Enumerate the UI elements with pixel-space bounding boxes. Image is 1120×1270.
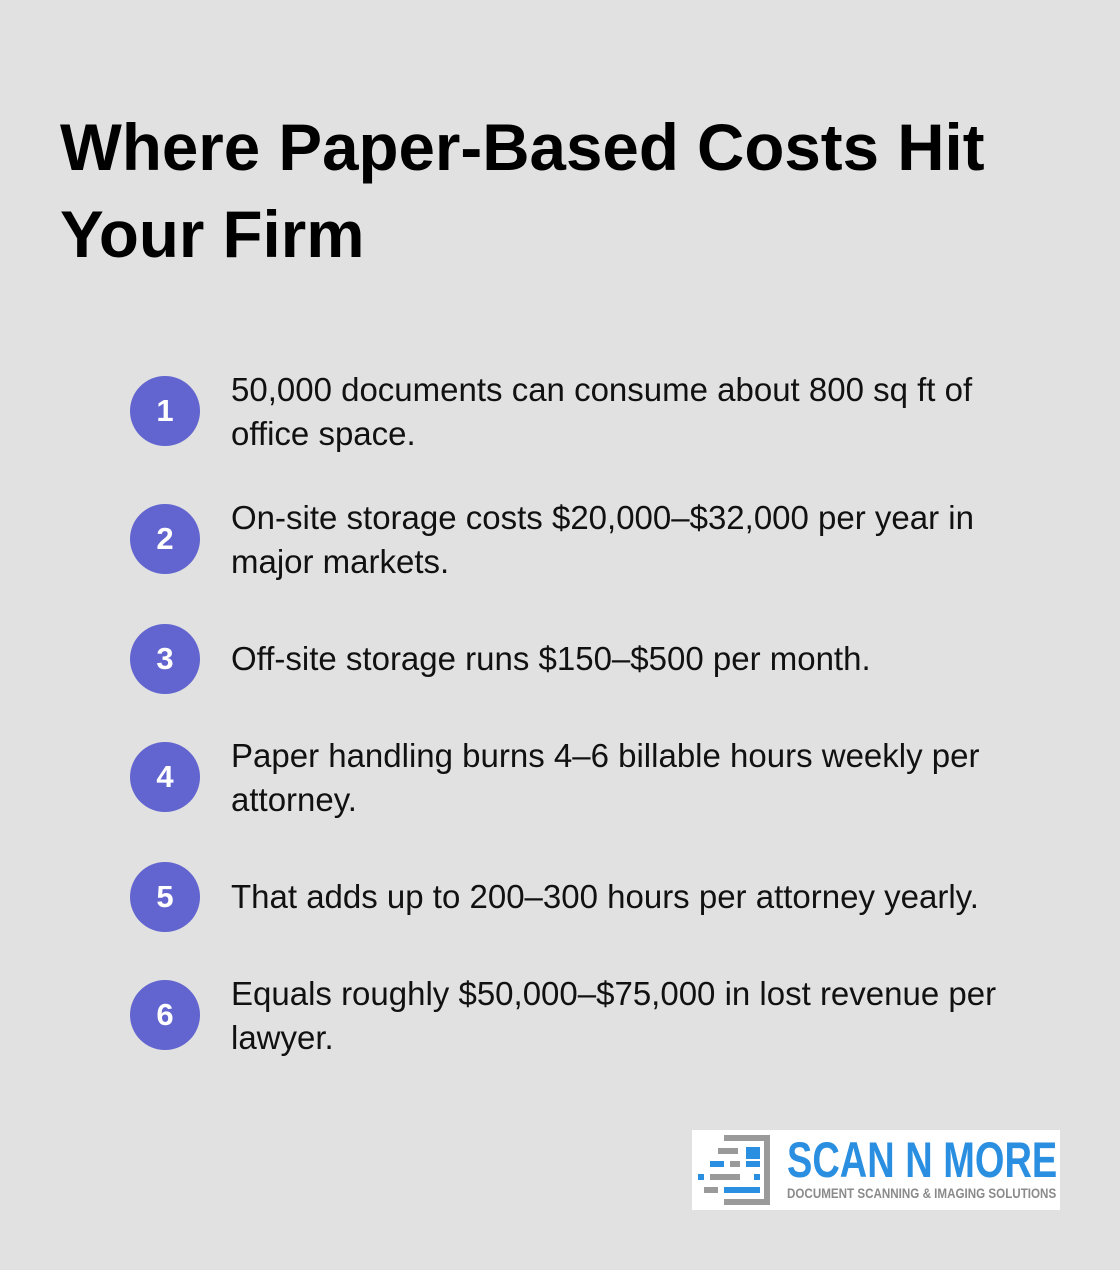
item 6: Equals roughly $50,000–$75,000 in lost revenue per lawyer. [231, 975, 996, 1056]
item 5 [130, 862, 979, 932]
item 1: 50,000 documents can consume about 800 sq ft of office space. [231, 371, 972, 452]
item 1: 1 [156, 393, 174, 428]
item 4: Paper handling burns 4–6 billable hours weekly per attorney. [231, 737, 979, 818]
item 3: 3 [156, 641, 174, 676]
item 2: On-site storage costs $20,000–$32,000 per year in major markets. [231, 499, 974, 580]
item 4: 4 [156, 759, 174, 794]
item 3 [130, 624, 871, 694]
logo [692, 1130, 1060, 1210]
logo: DOCUMENT SCANNING & IMAGING SOLUTIONS [787, 1185, 1056, 1201]
item 2: 2 [156, 521, 174, 556]
title [60, 111, 985, 271]
item 5: 5 [156, 879, 174, 914]
title: Where Paper-Based Costs Hit [60, 111, 985, 184]
item 5: That adds up to 200–300 hours per attorney yearly. [231, 878, 979, 915]
item 3: Off-site storage runs $150–$500 per month. [231, 640, 871, 677]
logo text: SCAN N MORE [787, 1132, 1057, 1188]
icon: scanner blocks [698, 1135, 770, 1205]
title: Your Firm [60, 198, 364, 271]
item 6: 6 [156, 997, 174, 1032]
